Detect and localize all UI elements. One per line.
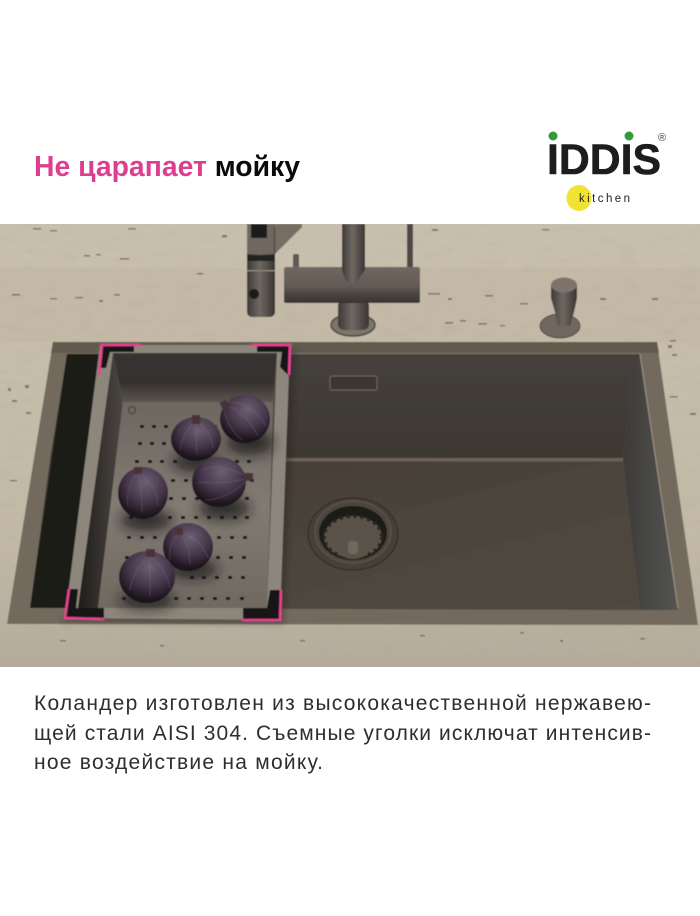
drain knob [348, 541, 358, 554]
drain strainer [324, 516, 382, 558]
dispenser body [551, 284, 577, 326]
description line 3: ное воздействие на мойку. [34, 751, 323, 774]
colander shadow [60, 350, 296, 624]
fig shadows [119, 431, 274, 609]
black corner bottom right [243, 590, 281, 620]
black corner top left [99, 346, 134, 368]
spray body [247, 224, 275, 317]
drain [308, 498, 398, 570]
logo wordmark: IDDIS [547, 136, 661, 184]
colander small logo mark [128, 406, 136, 414]
logo: IDDIS kitchen [547, 132, 666, 211]
title: Не царапает мойку [34, 151, 300, 183]
colander right wall [268, 358, 277, 578]
colander holes [122, 425, 254, 600]
soap dispenser [540, 278, 580, 338]
registered mark: ® [658, 132, 666, 144]
faucet base disc [331, 314, 375, 336]
faucet horizontal body [284, 267, 420, 303]
faucet spout column [342, 224, 365, 283]
logo yellow circle [566, 185, 592, 211]
pull-out spray faucet [247, 224, 302, 317]
rear rod [407, 224, 413, 276]
fig top right [219, 395, 270, 443]
sink basin floor [30, 460, 640, 610]
colander floor [98, 402, 273, 608]
black corner top right [257, 346, 290, 376]
black corner bottom left [66, 589, 104, 618]
sink left wall [30, 354, 105, 608]
photo: sink on stone counter [0, 214, 700, 677]
fig middle left [118, 467, 168, 519]
logo green dots [548, 132, 634, 140]
fig lower center [163, 523, 213, 571]
description line 2: щей стали AISI 304. Съемные уголки исключат интенсив- [34, 722, 651, 745]
spray arm [270, 224, 302, 254]
sink floor crease [284, 458, 623, 462]
faucet lower column [338, 300, 369, 330]
pink corner marks [65, 345, 290, 620]
fig middle right [192, 457, 253, 507]
fig upper center [171, 415, 221, 461]
dispenser top [551, 278, 577, 292]
drain flange [308, 498, 398, 570]
sink right wall highlight [640, 354, 678, 608]
sink rim inner edge [292, 353, 640, 354]
colander rim [65, 345, 290, 620]
fig bottom left [119, 549, 175, 603]
small lever [292, 254, 300, 268]
description text [34, 692, 651, 774]
main faucet [284, 224, 420, 336]
sink rim top band [51, 342, 659, 353]
stone countertop [0, 214, 700, 677]
logo kitchen label: kitchen [579, 193, 630, 205]
drain opening [319, 506, 387, 560]
colander [60, 345, 296, 624]
colander left wall [78, 353, 123, 608]
sink rim [7, 342, 698, 625]
overflow slot [330, 376, 377, 390]
sink basin back wall [50, 354, 633, 460]
dispenser base [540, 314, 580, 338]
spray button [249, 289, 259, 299]
description line 1: Коландер изготовлен из высококачественной нержавею- [34, 692, 651, 715]
colander back wall [113, 353, 277, 402]
sink right wall [623, 354, 678, 610]
